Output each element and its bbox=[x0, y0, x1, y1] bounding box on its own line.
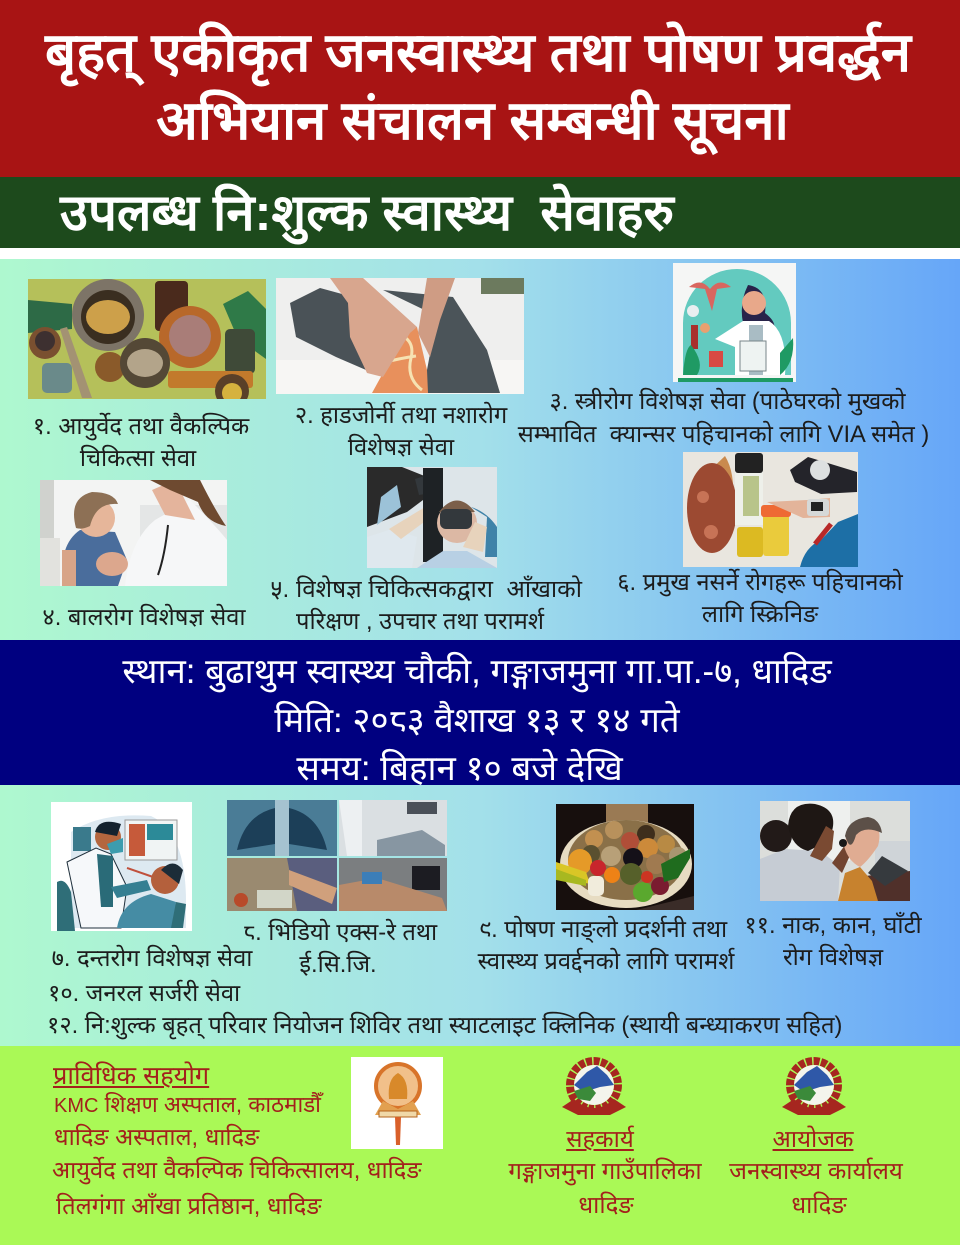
image: nutrition plate bbox=[556, 804, 694, 910]
title line 2: अभियान संचालन सम्बन्धी सूचना bbox=[156, 90, 789, 151]
label: service 8: ८. भिडियो एक्स-रे तथा bbox=[243, 920, 437, 946]
block: organizer: धादिङ bbox=[791, 1192, 847, 1219]
label: service 4: ४. बालरोग विशेषज्ञ सेवा bbox=[42, 605, 246, 631]
image: herbs bbox=[28, 279, 266, 399]
image: dental care bbox=[51, 802, 192, 931]
label: service 5 bbox=[270, 575, 582, 635]
label: service 12: १२. नि:शुल्क बृहत् परिवार नियोजन शिविर तथा स्याटलाइट क्लिनिक (स्थायी बन्ध्याकरण सहित) bbox=[47, 1013, 842, 1039]
panel: services lower bbox=[0, 785, 960, 1046]
label: service 1: १. आयुर्वेद तथा वैकल्पिक bbox=[33, 414, 249, 440]
label: service 8 bbox=[243, 918, 438, 978]
label: service 2: २. हाडजोर्नी तथा नशारोग bbox=[295, 403, 507, 429]
logo: government emblem right bbox=[782, 1057, 846, 1115]
support list: KMC शिक्षण अस्पताल, काठमाडौँ bbox=[54, 1092, 321, 1117]
label: service 3: ३. स्त्रीरोग विशेषज्ञ सेवा (पाठेघरको मुखको bbox=[549, 389, 906, 415]
label: service 1 bbox=[33, 412, 250, 472]
label: service 1: चिकित्सा सेवा bbox=[80, 446, 196, 472]
support list bbox=[52, 1092, 422, 1220]
label: service 6: लागि स्क्रिनिङ bbox=[702, 602, 818, 628]
image: eye examination bbox=[367, 467, 497, 568]
label: service 5: ५. विशेषज्ञ चिकित्सकद्वारा आँखाको bbox=[270, 576, 582, 603]
block: collaboration bbox=[508, 1126, 702, 1219]
heading: technical support: प्राविधिक सहयोग bbox=[53, 1062, 209, 1090]
panel: footer credits bbox=[0, 1046, 960, 1245]
label: service 3: सम्भावित क्यान्सर पहिचानको लागि VIA समेत ) bbox=[518, 422, 929, 448]
image: ENT exam bbox=[760, 801, 910, 901]
image: knee pain bbox=[276, 278, 524, 394]
block: collaboration: गङ्गाजमुना गाउँपालिका bbox=[508, 1158, 702, 1185]
support list: तिलगंगा आँखा प्रतिष्ठान, धादिङ bbox=[56, 1194, 321, 1220]
label: service 6 bbox=[617, 568, 904, 628]
support list: धादिङ अस्पताल, धादिङ bbox=[54, 1125, 259, 1151]
label: service 11: ११. नाक, कान, घाँटी bbox=[744, 913, 922, 939]
subheading banner bbox=[0, 177, 960, 248]
label: service 8: ई.सि.जि. bbox=[299, 952, 377, 978]
logo: government emblem left bbox=[562, 1057, 626, 1115]
label: service 9: स्वास्थ्य प्रवर्द्दनको लागि परामर्श bbox=[478, 949, 734, 975]
image: x-ray and ECG collage bbox=[227, 800, 447, 911]
label: service 9: ९. पोषण नाङ्लो प्रदर्शनी तथा bbox=[479, 917, 727, 943]
label: service 11 bbox=[744, 912, 922, 971]
label: service 2 bbox=[295, 402, 508, 461]
image: pediatric exam bbox=[40, 480, 227, 586]
label: service 6: ६. प्रमुख नसर्ने रोगहरू पहिचानको bbox=[617, 570, 903, 596]
block: organizer: आयोजक bbox=[773, 1126, 853, 1153]
label: service 2: विशेषज्ञ सेवा bbox=[348, 435, 454, 461]
place: स्थान: बुढाथुम स्वास्थ्य चौकी, गङ्गाजमुना गा.पा.-७, धादिङ bbox=[122, 652, 832, 691]
label: service 9 bbox=[478, 916, 735, 975]
label: service 5: परिक्षण , उपचार तथा परामर्श bbox=[296, 609, 544, 635]
date: मिति: २०८३ वैशाख १३ र १४ गते bbox=[274, 701, 680, 740]
time: समय: बिहान १० बजे देखि bbox=[296, 749, 623, 788]
info banner: place, date, time bbox=[0, 640, 960, 785]
image: gynecology doctor bbox=[673, 263, 796, 382]
label: service 10: १०. जनरल सर्जरी सेवा bbox=[48, 981, 240, 1007]
label: service 3 bbox=[518, 388, 929, 448]
block: organizer: जनस्वास्थ्य कार्यालय bbox=[729, 1158, 903, 1185]
logo: KMC bbox=[351, 1057, 443, 1149]
title line 1: बृहत् एकीकृत जनस्वास्थ्य तथा पोषण प्रवर्द्धन bbox=[45, 22, 911, 83]
image: screening equipment bbox=[683, 452, 858, 567]
panel: services upper bbox=[0, 259, 960, 640]
label: service 11: रोग विशेषज्ञ bbox=[783, 945, 883, 971]
support list: आयुर्वेद तथा वैकल्पिक चिकित्सालय, धादिङ bbox=[52, 1158, 421, 1184]
subheading banner: उपलब्ध नि:शुल्क स्वास्थ्य सेवाहरु bbox=[60, 184, 674, 241]
block: collaboration: सहकार्य bbox=[566, 1126, 634, 1153]
block: collaboration: धादिङ bbox=[578, 1192, 634, 1219]
header banner bbox=[0, 0, 960, 177]
block: organizer bbox=[729, 1126, 904, 1219]
label: service 7: ७. दन्तरोग विशेषज्ञ सेवा bbox=[52, 946, 252, 972]
